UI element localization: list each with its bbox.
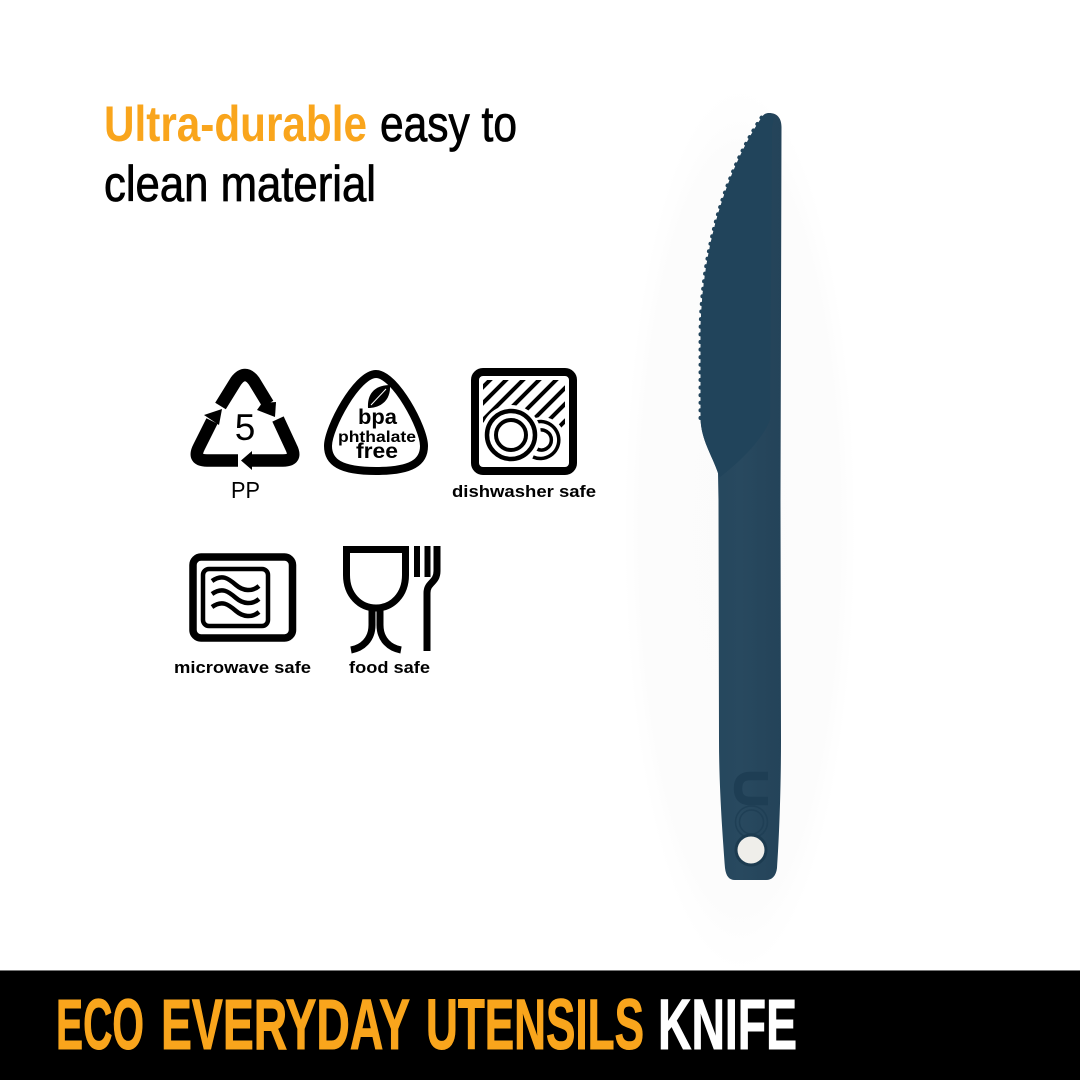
footer title: ECO [56,986,144,1065]
icon: microwave safe: microwave safe [174,658,311,677]
icon: bpa phthalate free: phthalate [338,429,416,446]
icon: bpa phthalate free: bpa [358,406,397,429]
knife [624,88,856,972]
footer title: EVERYDAY [161,986,410,1065]
icon: recycling code 5 PP [197,375,293,503]
title: clean material [104,156,376,212]
logo rings [736,806,768,838]
icon: recycling code 5 PP: PP [231,477,260,503]
icon: food safe [346,546,437,677]
logo mark [738,776,768,801]
icon: dishwasher safe: dishwasher safe [452,482,596,501]
icon: microwave safe [174,557,311,677]
icon: bpa phthalate free: free [356,440,398,463]
footer title: KNIFE [658,986,797,1065]
icon: bpa phthalate free [328,374,424,471]
title [104,96,517,212]
icon: recycling code 5 PP: 5 [235,407,255,448]
icon: dishwasher safe [452,368,596,497]
blade serrations [700,117,762,418]
footer band [0,970,1080,1080]
title: Ultra-durable [104,96,367,152]
icon: food safe: food safe [349,658,430,677]
handle hole [734,834,768,866]
footer title [56,986,797,1065]
footer title: UTENSILS [426,986,644,1065]
title: easy to [380,96,517,152]
